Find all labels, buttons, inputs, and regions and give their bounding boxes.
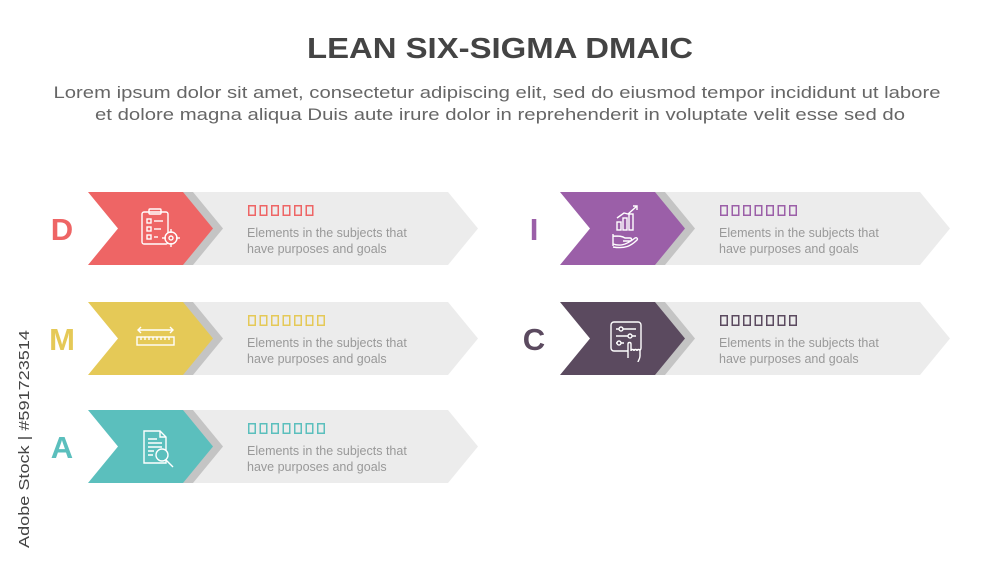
text A: have purposes and goals (247, 460, 387, 474)
heading A (249, 424, 324, 433)
panel: D (51, 192, 478, 265)
text M: Elements in the subjects that (247, 336, 407, 350)
text C: have purposes and goals (719, 352, 859, 366)
icon: clipboard target (142, 209, 180, 247)
light chevron I (664, 192, 950, 265)
text I: have purposes and goals (719, 242, 859, 256)
text M (247, 336, 407, 366)
text C: Elements in the subjects that (719, 336, 879, 350)
panel: M (49, 302, 478, 375)
icon: document search (144, 431, 173, 467)
light chevron D (192, 192, 478, 265)
text A: Elements in the subjects that (247, 444, 407, 458)
subtitle (54, 83, 940, 124)
heading D (249, 206, 313, 215)
panel: I (530, 192, 950, 265)
panel: C (523, 302, 950, 375)
letter C: C (523, 322, 545, 357)
side stock text: Adobe Stock | #591723514 (16, 330, 33, 548)
text D (247, 226, 407, 256)
title: LEAN SIX-SIGMA DMAIC (307, 33, 693, 65)
letter I: I (530, 212, 538, 247)
text D: have purposes and goals (247, 242, 387, 256)
heading M (249, 316, 324, 325)
subtitle: et dolore magna aliqua Duis aute irure dolor in reprehenderit in voluptate velit esse sed do (95, 105, 905, 124)
colored chevron C (560, 302, 685, 375)
icon: control panel touch (611, 322, 641, 362)
text A (247, 444, 407, 474)
colored chevron A (88, 410, 213, 483)
colored chevron I (560, 192, 685, 265)
light chevron C (664, 302, 950, 375)
text D: Elements in the subjects that (247, 226, 407, 240)
light chevron A (192, 410, 478, 483)
letter A: A (51, 430, 73, 465)
letter M: M (49, 322, 75, 357)
light chevron M (192, 302, 478, 375)
subtitle: Lorem ipsum dolor sit amet, consectetur adipiscing elit, sed do eiusmod tempor incididunt ut labore (54, 83, 940, 102)
letter D: D (51, 212, 73, 247)
icon: growth hand (613, 206, 637, 248)
text I: Elements in the subjects that (719, 226, 879, 240)
heading I (721, 206, 796, 215)
text I (719, 226, 879, 256)
text C (719, 336, 879, 366)
text M: have purposes and goals (247, 352, 387, 366)
colored chevron D (88, 192, 213, 265)
icon: ruler (137, 327, 174, 345)
colored chevron M (88, 302, 213, 375)
heading C (721, 316, 796, 325)
panel: A (51, 410, 478, 483)
